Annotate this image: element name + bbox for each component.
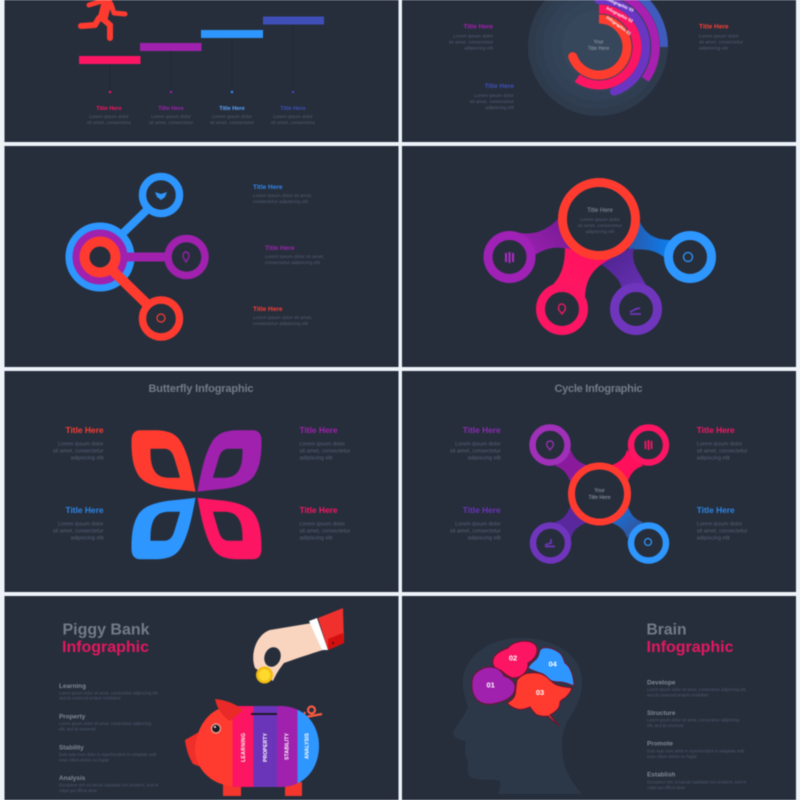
list: establish bbox=[647, 772, 747, 790]
hub text bbox=[588, 488, 611, 501]
heading: Piggy Bank bbox=[62, 622, 150, 638]
list: stability: esse cillum dolore eu fugiat bbox=[59, 758, 109, 762]
heading bbox=[62, 622, 150, 656]
step labels bbox=[87, 106, 316, 126]
label: pink: adipiscing elit bbox=[300, 536, 333, 542]
lobe numbers: 04 bbox=[549, 660, 558, 669]
step labels: sit amet, consectetur bbox=[210, 120, 255, 126]
heading: Infographic bbox=[62, 639, 149, 656]
label: purple: adipiscing elit bbox=[300, 456, 333, 462]
label: blue: Title Here bbox=[697, 505, 735, 515]
label: pink: Title Here bbox=[697, 425, 735, 435]
label: purple: Title Here bbox=[265, 245, 295, 252]
petal: purple bbox=[198, 430, 262, 492]
label: red: adipiscing elit bbox=[699, 46, 728, 52]
label: violet bbox=[450, 505, 501, 542]
list: promote: Duis aute irure dolor in reprehenderit in voluptate velit bbox=[647, 748, 745, 754]
label: red: Lorem ipsum dolor sit amet, bbox=[253, 315, 312, 321]
step labels: Title Here bbox=[96, 106, 122, 112]
list: analysis: Analysis bbox=[59, 775, 86, 782]
hub text: adipiscing elit bbox=[586, 229, 615, 235]
brain lobes bbox=[472, 641, 574, 726]
label: blue: consectetur adipiscing elit bbox=[253, 199, 309, 205]
panel: brain bbox=[402, 596, 796, 800]
red branch bbox=[84, 242, 180, 337]
step labels: Lorem ipsum dolor bbox=[89, 114, 129, 120]
step labels: sit amet, consectetur bbox=[87, 120, 132, 126]
label: purple: Lorem ipsum dolor bbox=[300, 442, 345, 448]
connectors bbox=[520, 210, 672, 300]
list: property: Property bbox=[59, 714, 86, 720]
label: pink: adipiscing elit bbox=[697, 456, 730, 462]
list: structure bbox=[647, 710, 740, 728]
icon: people bbox=[646, 440, 652, 450]
label: pink bbox=[300, 505, 350, 542]
label: blue: Lorem ipsum dolor bbox=[697, 522, 742, 528]
label: red: Title Here bbox=[253, 306, 283, 313]
icon: piggy bank bbox=[185, 699, 322, 796]
lobe 02 bbox=[493, 641, 537, 678]
label: red: Lorem ipsum dolor bbox=[699, 34, 739, 40]
list: learning: Learning bbox=[59, 683, 86, 690]
label: blue bbox=[53, 505, 104, 542]
step labels: Lorem ipsum dolor bbox=[151, 114, 191, 120]
list: stability bbox=[59, 744, 157, 762]
list: develope bbox=[647, 680, 747, 698]
label: pink: Title Here bbox=[300, 505, 338, 515]
icon: location pin bbox=[183, 252, 189, 262]
label: blue: Title Here bbox=[65, 505, 104, 515]
lobe numbers bbox=[487, 653, 558, 697]
step labels: Title Here bbox=[280, 106, 306, 112]
label: blue: Lorem ipsum dolor bbox=[58, 522, 104, 528]
label: red bbox=[253, 306, 312, 327]
arc labels bbox=[605, 0, 635, 36]
label: pink: Lorem ipsum dolor bbox=[300, 522, 345, 528]
concentric discs bbox=[528, 0, 668, 116]
center text bbox=[588, 40, 609, 52]
list: stability: Stability bbox=[59, 744, 84, 752]
icon: hand bbox=[630, 308, 641, 314]
hub ring bbox=[572, 466, 628, 522]
label: purple: sit amet, consectetur bbox=[300, 448, 350, 454]
panel: butterfly bbox=[4, 371, 398, 592]
icon: people bbox=[506, 252, 513, 263]
label: indigo: Lorem ipsum dolor bbox=[474, 93, 514, 99]
step labels: Title Here bbox=[158, 106, 184, 112]
step labels: Lorem ipsum dolor bbox=[212, 114, 252, 120]
label: red bbox=[53, 425, 104, 462]
list: promote: Promote bbox=[647, 740, 673, 748]
connectors bbox=[555, 450, 643, 538]
label: purple: adipiscing elit bbox=[468, 456, 501, 462]
list: establish: Establish bbox=[647, 772, 676, 778]
label: indigo bbox=[470, 83, 515, 111]
label: purple: Title Here bbox=[300, 425, 338, 435]
head silhouette bbox=[453, 638, 582, 794]
step labels: Title Here bbox=[219, 106, 245, 112]
list: structure: Structure bbox=[647, 710, 676, 717]
list: property: Lorem ipsum dolor sit amet, consectetur adipiscing bbox=[59, 721, 152, 726]
list: establish: culpa qui officia dese bbox=[647, 785, 686, 790]
label: pink bbox=[697, 425, 748, 462]
lobe 03 bbox=[507, 673, 572, 726]
purple branch bbox=[76, 233, 205, 281]
heading bbox=[646, 622, 734, 656]
list: structure: elit, sed do eiusmod bbox=[647, 723, 684, 728]
arc labels: Infographic 01 bbox=[605, 15, 633, 36]
satellite rings bbox=[532, 428, 666, 560]
label: purple: adipiscing elit bbox=[464, 46, 494, 52]
arc labels: Infographic 02 bbox=[606, 5, 634, 24]
list: learning: sed do eiusmod tempor incididunt bbox=[59, 696, 121, 700]
list: learning bbox=[59, 683, 159, 700]
step labels: sit amet, consectetur bbox=[149, 120, 194, 126]
blue branch bbox=[70, 176, 180, 286]
label: indigo: Title Here bbox=[484, 83, 514, 90]
step labels: sit amet, consectetur bbox=[271, 120, 316, 126]
heading: Brain bbox=[646, 622, 686, 638]
lobe 01 bbox=[472, 667, 515, 704]
label: purple: consectetur adipiscing elit bbox=[265, 260, 321, 266]
radial arcs bbox=[568, 0, 664, 91]
list: promote bbox=[647, 740, 745, 759]
icon: bulb bbox=[559, 304, 565, 314]
title: Cycle Infographic bbox=[554, 383, 642, 395]
label: violet: adipiscing elit bbox=[468, 536, 501, 542]
panel: branching circles bbox=[4, 146, 398, 367]
label: red: Title Here bbox=[699, 24, 729, 30]
panel: radial bars bbox=[402, 0, 796, 142]
heading: Infographic bbox=[646, 639, 734, 656]
list: analysis bbox=[59, 775, 159, 793]
label: blue bbox=[253, 184, 312, 205]
lobe numbers: 01 bbox=[487, 681, 495, 690]
icon: piggy bank: LEARNING bbox=[241, 733, 247, 762]
list: analysis: Excepteur sint occaecat cupidatat non proident, sunt in bbox=[59, 782, 159, 788]
step labels: Lorem ipsum dolor bbox=[273, 114, 313, 120]
label: purple bbox=[450, 425, 501, 462]
hub text bbox=[578, 208, 623, 235]
label: purple: sit amet, consectetur bbox=[450, 448, 501, 454]
label: purple bbox=[265, 245, 324, 266]
panel: stairs bbox=[4, 0, 398, 142]
label: pink: Lorem ipsum dolor bbox=[697, 442, 742, 448]
label: blue: sit amet, consectetur bbox=[53, 528, 104, 534]
list: property bbox=[59, 714, 152, 732]
title: Butterfly Infographic bbox=[148, 383, 254, 395]
lobe 04 bbox=[528, 648, 574, 686]
list: stability: Duis aute irure dolor in reprehenderit in voluptate velit bbox=[59, 752, 157, 757]
icon: piggy bank: ANALYSIS bbox=[304, 732, 310, 759]
label: blue: Lorem ipsum dolor sit amet, bbox=[253, 193, 312, 199]
label: purple: Title Here bbox=[463, 425, 501, 435]
label: red: Title Here bbox=[65, 425, 104, 435]
label: red: Lorem ipsum dolor bbox=[58, 442, 104, 448]
label: purple bbox=[300, 425, 350, 462]
label: blue bbox=[697, 505, 748, 542]
hub ring bbox=[562, 182, 636, 256]
center text: Your bbox=[593, 40, 604, 46]
center text: Title Here bbox=[588, 46, 609, 52]
list: establish: Excepteur sint occaecat cupidatat non proident, sunt in bbox=[647, 780, 747, 784]
list: promote: esse cillum dolore eu fugiat bbox=[647, 754, 697, 759]
label: purple: Title Here bbox=[463, 24, 493, 30]
hub text: sit amet, consectetur bbox=[578, 223, 623, 229]
list: develope: sed do eiusmod tempor incididunt bbox=[647, 692, 709, 698]
label: indigo: adipiscing elit bbox=[485, 105, 515, 111]
label: red: sit amet, consectetur bbox=[53, 448, 104, 454]
label: pink: sit amet, consectetur bbox=[697, 448, 748, 454]
hub text: Title Here bbox=[588, 495, 611, 501]
petal: red bbox=[132, 430, 196, 492]
label: purple: Lorem ipsum dolor sit amet, bbox=[265, 254, 324, 260]
icon: hand with coin bbox=[253, 608, 344, 684]
icon: phone bbox=[684, 252, 692, 262]
label: purple: sit amet, consectetur bbox=[449, 40, 493, 46]
hub text: Your bbox=[594, 488, 605, 494]
hub text: Lorem ipsum dolor bbox=[580, 217, 620, 223]
hub text: Title Here bbox=[587, 208, 614, 214]
label: red: sit amet, consectetur bbox=[699, 40, 744, 46]
list: learning: Lorem ipsum dolor sit amet, consectetur adipiscing elit, bbox=[59, 690, 159, 696]
petal: pink bbox=[198, 498, 262, 559]
label: blue: adipiscing elit bbox=[697, 536, 730, 542]
list: property: elit, sed do eiusmod bbox=[59, 726, 96, 732]
icon: handshake bbox=[155, 192, 167, 200]
panel: piggy bank bbox=[4, 596, 398, 800]
label: indigo: sit amet, consectetur bbox=[470, 99, 514, 105]
label: violet: Lorem ipsum dolor bbox=[455, 522, 501, 528]
petal: blue bbox=[132, 498, 196, 559]
icon: piggy bank: PROPERTY bbox=[263, 732, 269, 762]
label: purple: Lorem ipsum dolor bbox=[453, 34, 493, 40]
label: pink: sit amet, consectetur bbox=[300, 528, 350, 534]
icon: piggy bank: STABILITY bbox=[284, 732, 290, 760]
satellite rings bbox=[488, 236, 712, 330]
list: structure: Lorem ipsum dolor sit amet, consectetur adipiscing bbox=[647, 718, 740, 722]
icon: running figure bbox=[81, 1, 125, 38]
label: red: adipiscing elit bbox=[70, 456, 104, 462]
label: purple bbox=[449, 24, 494, 52]
label: blue: Title Here bbox=[253, 184, 283, 191]
lobe numbers: 03 bbox=[536, 688, 544, 697]
label: blue: sit amet, consectetur bbox=[697, 528, 748, 534]
list: analysis: culpa qui officia dese bbox=[59, 788, 98, 793]
icon: hand bbox=[545, 539, 555, 546]
list: develope: Develope bbox=[647, 680, 676, 686]
panel: metaball hub bbox=[402, 146, 796, 367]
label: violet: sit amet, consectetur bbox=[450, 528, 501, 534]
icon: phone badge bbox=[157, 314, 165, 322]
label: red bbox=[699, 24, 744, 52]
lobe numbers: 02 bbox=[509, 653, 517, 662]
panel: cycle bbox=[402, 371, 796, 592]
icon: pin bbox=[547, 441, 553, 450]
label: red: consectetur adipiscing elit bbox=[253, 321, 309, 327]
icon: phone bbox=[644, 538, 652, 546]
label: violet: Title Here bbox=[463, 505, 501, 515]
label: purple: Lorem ipsum dolor bbox=[455, 442, 501, 448]
label: blue: adipiscing elit bbox=[70, 536, 104, 542]
list: develope: Lorem ipsum dolor sit amet, consectetur adipiscing elit, bbox=[647, 687, 747, 692]
stair steps bbox=[79, 16, 324, 93]
